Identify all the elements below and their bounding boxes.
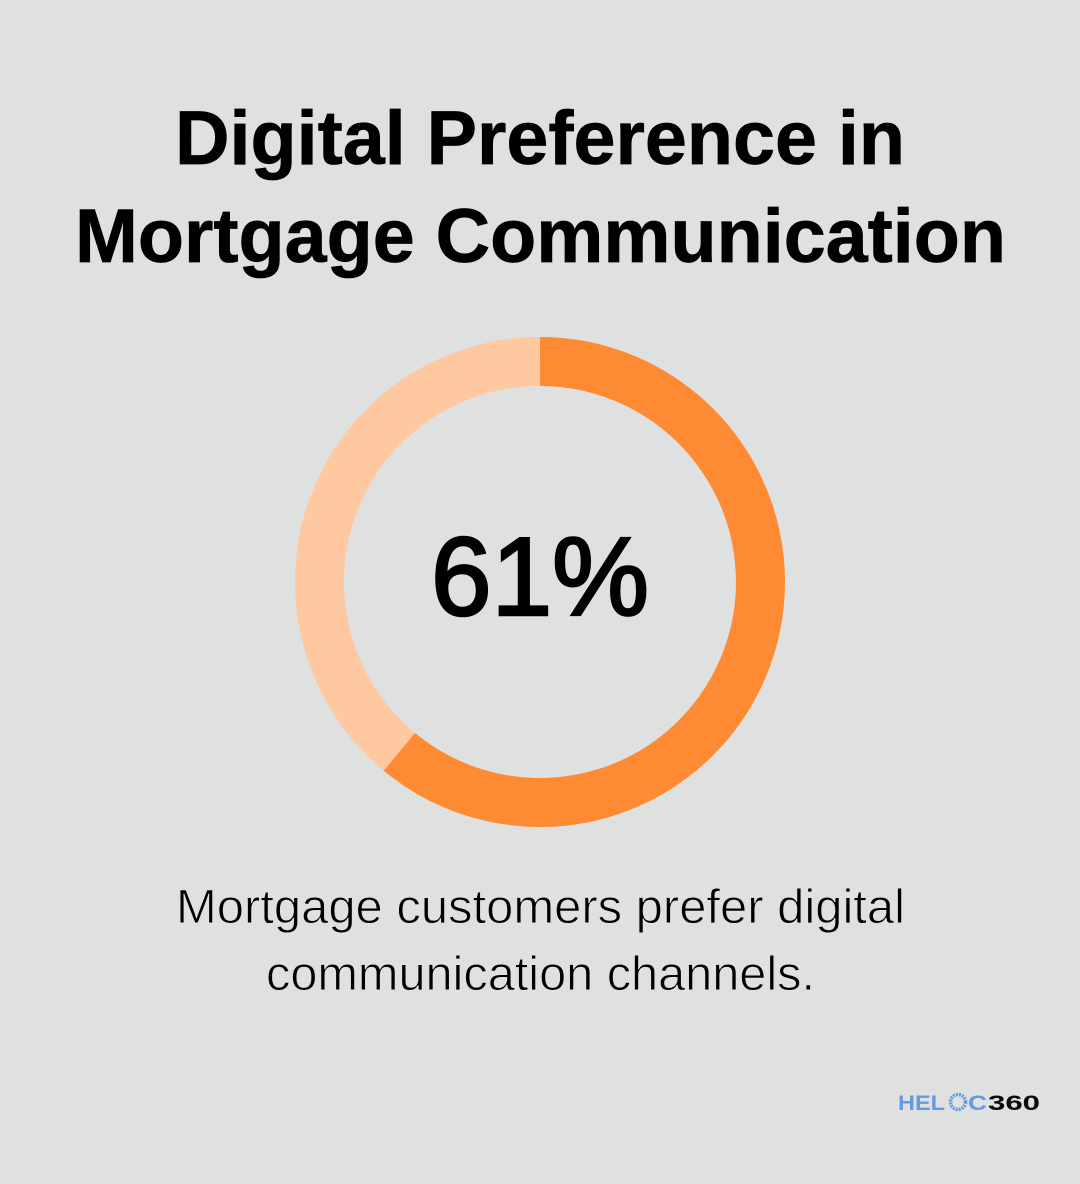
logo: HELOC360: [898, 1092, 1040, 1115]
logo: HELOC360: HEL: [898, 1092, 945, 1115]
description text: [176, 881, 905, 1001]
logo: HELOC360: 360: [988, 1092, 1040, 1115]
description text: Mortgage customers prefer digital: [176, 881, 905, 934]
logo swirl icon: [950, 1094, 966, 1110]
title: Mortgage Communication: [75, 194, 1006, 279]
percentage value: 61%: [431, 515, 649, 639]
donut track: [320, 362, 760, 802]
description text: communication channels.: [266, 948, 815, 1001]
title: Digital Preference in: [175, 96, 905, 181]
logo: HELOC360: C: [968, 1092, 987, 1115]
donut value arc: [399, 362, 760, 802]
donut chart: 61%: [320, 362, 760, 802]
title: [75, 96, 1006, 279]
